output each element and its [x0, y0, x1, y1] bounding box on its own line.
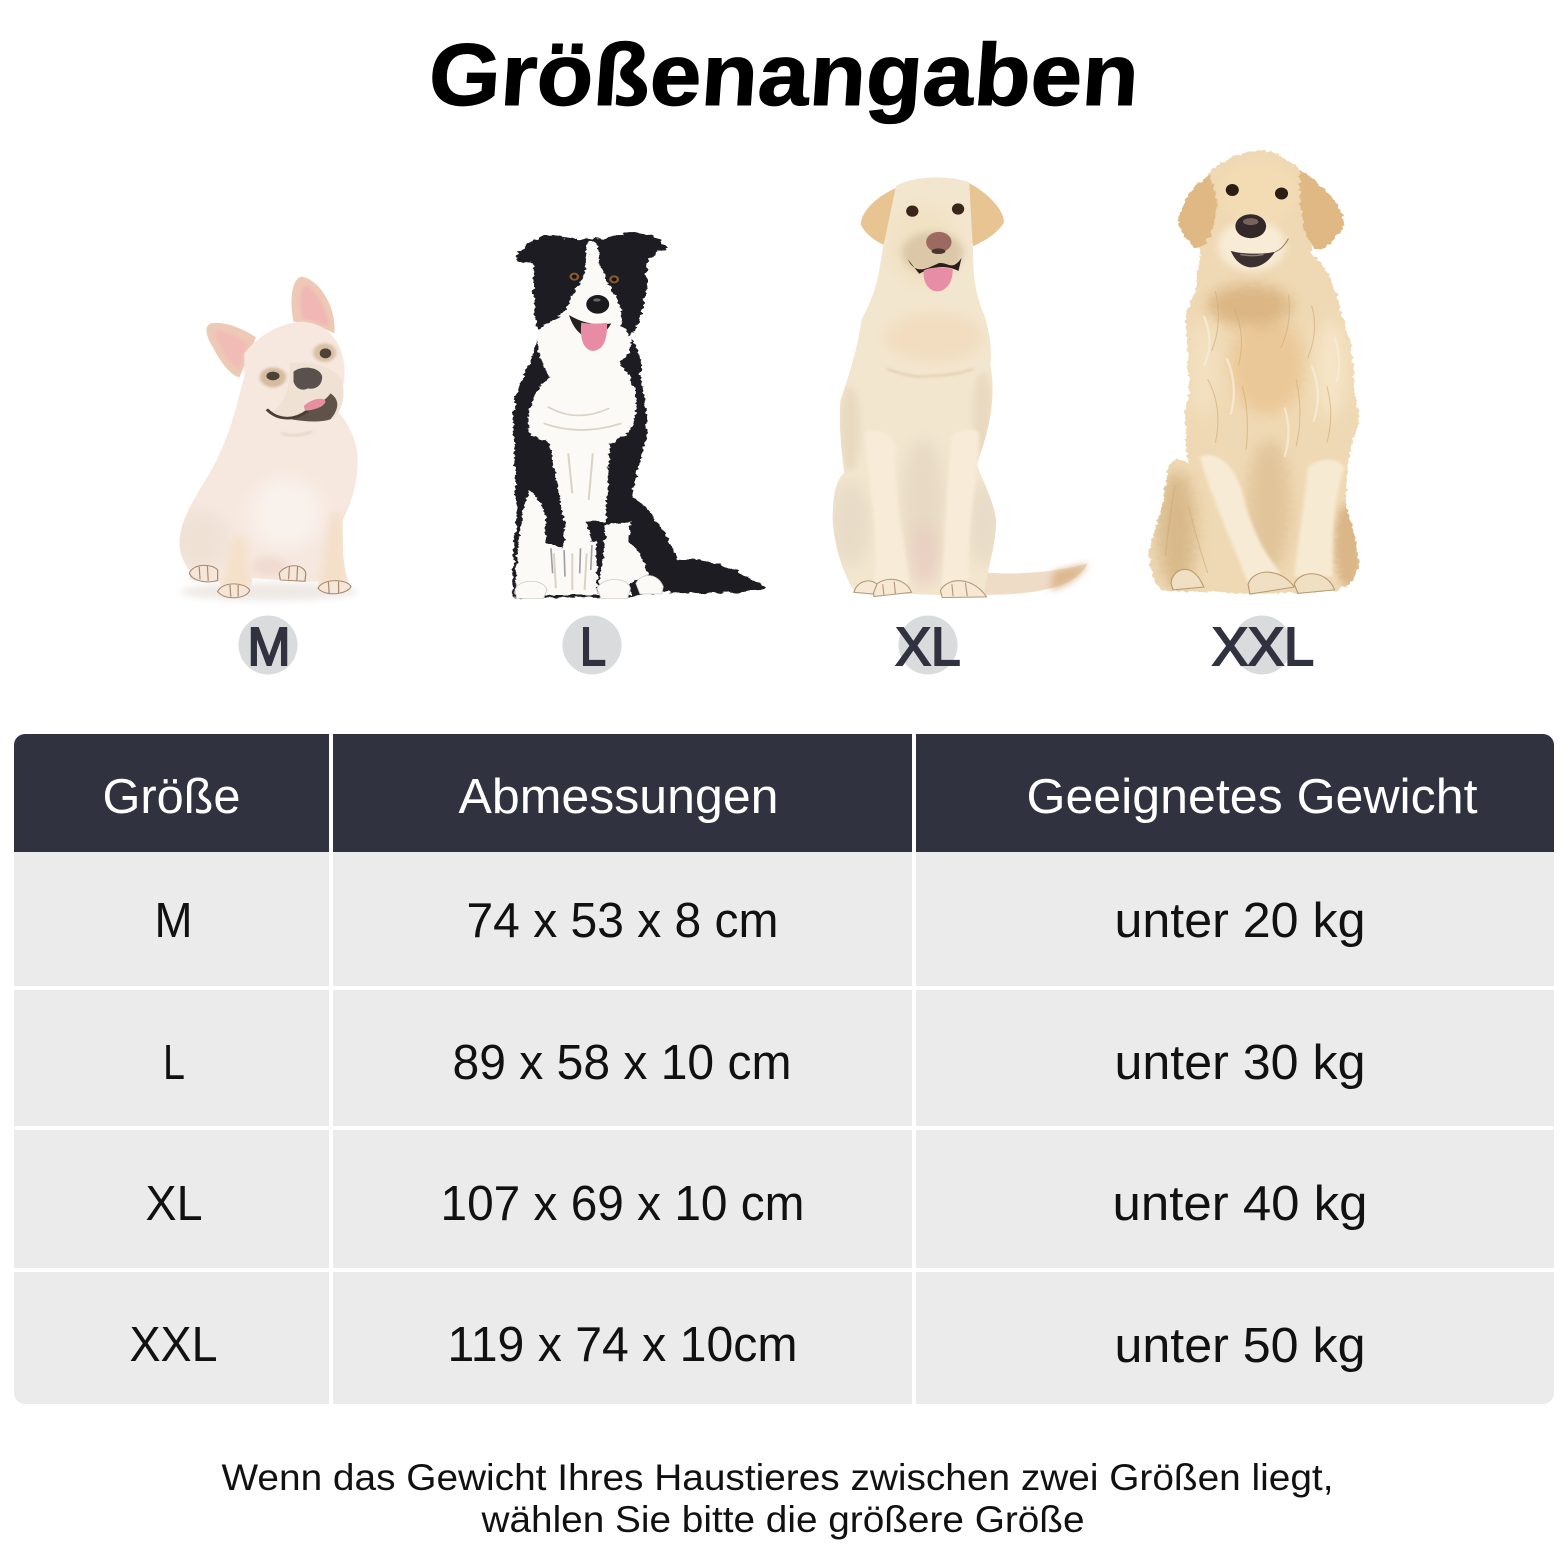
paws	[515, 575, 663, 598]
table row XXL: XXL	[130, 1318, 218, 1372]
table header row	[14, 734, 1554, 852]
footer note	[222, 1457, 1334, 1540]
tail	[983, 563, 1088, 595]
footer note: Wenn das Gewicht Ihres Haustieres zwischen zwei Größen liegt,	[222, 1457, 1334, 1498]
table row M	[14, 852, 1554, 986]
table row L: unter 30 kg	[1114, 1036, 1366, 1090]
table row XXL	[14, 1272, 1554, 1404]
body	[179, 322, 358, 599]
fur strands	[1165, 291, 1331, 573]
title: Größenangaben	[426, 25, 1143, 124]
dog photo: Golden Retriever, size XXL	[1150, 151, 1362, 594]
dog photo: Labrador, size XL	[831, 177, 1088, 598]
table row M: M	[154, 894, 192, 948]
black and white coat	[513, 232, 767, 597]
footer note: wählen Sie bitte die größere Größe	[480, 1499, 1084, 1540]
size label XXL: XXL	[1212, 617, 1314, 677]
size label L: L	[580, 617, 606, 677]
table row L: L	[163, 1036, 185, 1090]
size label M: M	[248, 617, 290, 677]
dog photo: French bulldog, size M	[170, 277, 358, 601]
table row M: 74 x 53 x 8 cm	[466, 894, 778, 948]
table header row: Geeignetes Gewicht	[1026, 770, 1478, 824]
table row L: 89 x 58 x 10 cm	[452, 1036, 792, 1090]
coat	[1150, 151, 1362, 594]
table header row: Abmessungen	[458, 770, 778, 824]
size label XL: XL	[896, 617, 960, 677]
front legs	[1200, 455, 1281, 584]
paws	[1171, 569, 1335, 594]
table row XXL: unter 50 kg	[1114, 1319, 1366, 1373]
fur shading	[544, 407, 622, 590]
table row XL: XL	[146, 1177, 202, 1231]
paws	[189, 565, 351, 598]
paws	[854, 579, 987, 598]
table row M: unter 20 kg	[1114, 894, 1366, 948]
ears	[206, 277, 335, 377]
dog photo: Border Collie, size L	[513, 232, 767, 598]
front legs	[865, 431, 910, 587]
face	[1218, 161, 1296, 271]
body	[833, 177, 996, 597]
face	[902, 203, 964, 291]
ears	[861, 182, 1004, 248]
table row XXL: 119 x 74 x 10cm	[448, 1318, 798, 1372]
face	[260, 343, 343, 421]
table row L	[14, 990, 1554, 1126]
table row XL: 107 x 69 x 10 cm	[440, 1177, 804, 1231]
table row XL: unter 40 kg	[1112, 1177, 1368, 1231]
table row XL	[14, 1130, 1554, 1268]
size table	[14, 734, 1554, 1404]
size label L	[562, 616, 622, 677]
face	[569, 273, 619, 351]
table header row: Größe	[102, 770, 240, 824]
